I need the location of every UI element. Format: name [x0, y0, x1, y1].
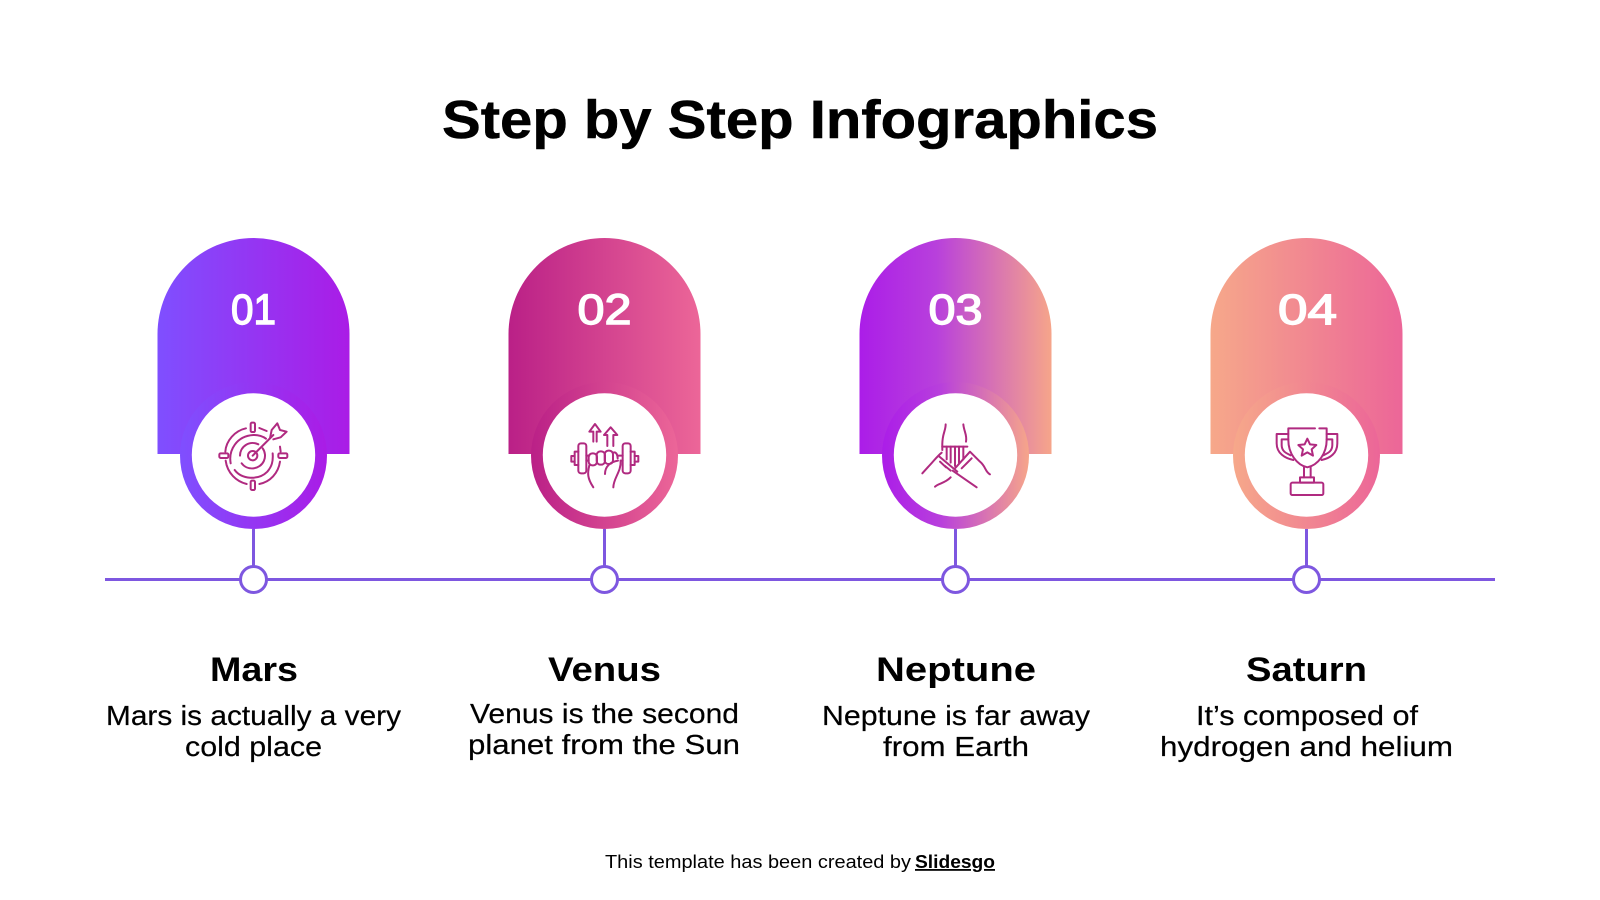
title: Step by Step Infographics [442, 90, 1158, 150]
footer credit: Slidesgo [915, 852, 995, 872]
step 01 badge [158, 238, 350, 529]
icon: trophy [1277, 428, 1337, 495]
footer credit: This template has been created by [605, 852, 911, 872]
text: Mars: cold place [185, 731, 322, 762]
text: Saturn [1160, 651, 1453, 762]
text: Venus [468, 651, 740, 760]
text: Mars: Mars is actually a very [106, 700, 401, 731]
text: Venus: planet from the Sun [468, 729, 740, 760]
text: Saturn: hydrogen and helium [1160, 731, 1453, 762]
step 03 badge [860, 238, 1052, 529]
text: Neptune: Neptune [876, 651, 1036, 689]
icon: fist lifting dumbbell [571, 424, 638, 487]
text: Neptune: from Earth [883, 731, 1029, 762]
text: Mars: Mars [210, 651, 298, 689]
number 03: 03 [928, 286, 982, 334]
icon: stacked hands [922, 424, 990, 487]
step 04 badge [1210, 238, 1402, 529]
text: Venus: Venus is the second [470, 698, 739, 729]
text: Venus: Venus [548, 651, 661, 689]
icon: target with arrow [219, 423, 287, 490]
number 04: 04 [1278, 286, 1337, 334]
number 02: 02 [578, 286, 632, 334]
text: Neptune [822, 651, 1090, 762]
text: Saturn: It’s composed of [1196, 700, 1418, 731]
text: Neptune: Neptune is far away [822, 700, 1090, 731]
timeline [105, 529, 1495, 592]
text: Saturn: Saturn [1246, 651, 1367, 689]
step 02 badge [508, 238, 700, 529]
text: Mars [106, 651, 401, 762]
number 01: 01 [231, 286, 276, 334]
